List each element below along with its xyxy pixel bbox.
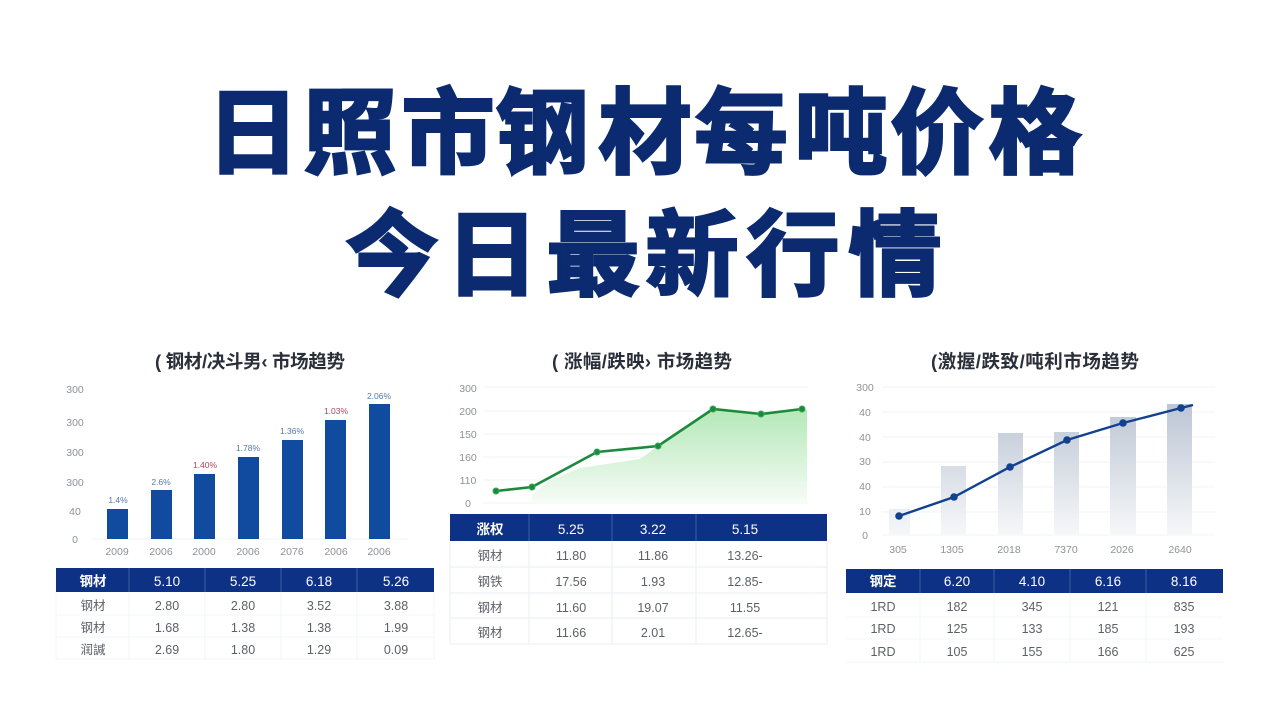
bar chart: yearly values: 1.4%	[108, 495, 128, 505]
title: 日照市钢材每吨价格	[206, 82, 1082, 186]
combo chart: bars with line: 40	[859, 481, 871, 493]
panel heading: middle: ( 涨幅/跌映› 市场趋势	[552, 351, 732, 372]
data table: right: 625	[1174, 645, 1194, 659]
data table: middle: 19.07	[637, 601, 669, 615]
combo chart: bars with line: 300	[856, 382, 874, 394]
data table: left: 1.68	[155, 621, 179, 635]
data table: left: 3.88	[384, 599, 408, 613]
combo chart: bars with line: 0	[862, 530, 868, 542]
data table: left: 2.69	[155, 643, 179, 657]
data table: middle: 钢材	[477, 626, 503, 640]
data table: left: 润諴	[80, 642, 106, 657]
bar chart: yearly values	[66, 384, 408, 558]
data table: middle: 1.93	[641, 575, 665, 589]
data table: left: 0.09	[384, 643, 408, 657]
combo chart: bars with line: 2018	[997, 544, 1021, 556]
data table: right	[846, 569, 1223, 662]
data table: right: 345	[1022, 600, 1042, 614]
data table: right: 1RD	[870, 622, 896, 636]
data table: right: 835	[1174, 600, 1194, 614]
data table: left: 2.80	[231, 599, 255, 613]
bar chart: yearly values: 2076	[280, 546, 304, 558]
line chart: green area: 300	[459, 383, 477, 395]
data table: left: 2.80	[155, 599, 179, 613]
data table: middle: 11.60	[556, 601, 586, 615]
data table: middle: 17.56	[555, 575, 587, 589]
data table: left: 3.52	[307, 599, 331, 613]
bar chart: yearly values: 0	[72, 534, 78, 546]
combo chart: bars with line: 7370	[1054, 544, 1078, 556]
line chart: green area: 150	[459, 429, 477, 441]
line chart: green area: 200	[459, 406, 477, 418]
data table: left: 1.29	[307, 643, 331, 657]
data table: right: 185	[1098, 622, 1118, 636]
data table: right: 4.10	[1019, 574, 1045, 589]
combo chart: bars with line: 30	[859, 456, 871, 468]
data table: right: 1RD	[870, 645, 896, 659]
data table: middle: 3.22	[640, 522, 666, 537]
bar chart: yearly values: 300	[66, 447, 84, 459]
bar chart: yearly values: 40	[69, 506, 81, 518]
line chart: green area: 0	[465, 498, 471, 510]
data table: middle: 钢铁	[477, 575, 503, 589]
data table: left	[56, 568, 434, 659]
data table: right: 6.16	[1095, 574, 1121, 589]
data table: middle: 11.66	[556, 626, 586, 640]
data table: left: 5.25	[230, 574, 256, 589]
data table: middle: 涨权	[476, 521, 504, 537]
data table: left: 1.99	[384, 621, 408, 635]
data table: right: 8.16	[1171, 574, 1197, 589]
bar chart: yearly values: 300	[66, 477, 84, 489]
bar chart: yearly values: 1.78%	[236, 443, 260, 453]
combo chart: bars with line: 2026	[1110, 544, 1134, 556]
bar chart: yearly values: 2000	[192, 546, 216, 558]
line chart: green area: 160	[459, 452, 477, 464]
combo chart: bars with line: 2640	[1168, 544, 1192, 556]
data table: middle: 5.25	[558, 522, 584, 537]
data table: left: 1.38	[307, 621, 331, 635]
data table: left: 钢材	[80, 599, 106, 613]
combo chart: bars with line: 40	[859, 432, 871, 444]
data table: middle: 5.15	[732, 522, 758, 537]
data table: middle: 11.55	[730, 601, 760, 615]
data table: left: 钢材	[80, 573, 107, 589]
bar chart: yearly values: 300	[66, 417, 84, 429]
data table: right: 105	[947, 645, 967, 659]
panel: left bar chart and table	[56, 351, 434, 659]
panel heading: right: (激握/跌致/吨利市场趋势	[931, 351, 1139, 372]
data table: right: 1RD	[870, 600, 896, 614]
data table: right: 125	[947, 622, 967, 636]
data table: middle: 11.80	[556, 549, 586, 563]
data table: middle: 11.86	[638, 549, 668, 563]
data table: middle: 2.01	[641, 626, 665, 640]
line chart: green area: 110	[460, 475, 477, 487]
bar chart: yearly values: 2006	[367, 546, 391, 558]
data table: right: 钢定	[870, 573, 897, 589]
bar chart: yearly values: 2006	[149, 546, 173, 558]
bar chart: yearly values: 2.06%	[367, 391, 391, 401]
combo chart: bars with line: 40	[859, 407, 871, 419]
bar chart: yearly values: 1.03%	[324, 406, 348, 416]
bar chart: yearly values: 2009	[105, 546, 129, 558]
data table: middle: 钢材	[477, 601, 503, 615]
data table: middle: 13.26-	[727, 549, 763, 563]
data table: left: 5.26	[383, 574, 409, 589]
data table: right: 182	[947, 600, 967, 614]
data table: right: 6.20	[944, 574, 970, 589]
data table: right: 133	[1022, 622, 1042, 636]
panel: middle line chart and table	[450, 351, 827, 644]
data table: middle: 12.65-	[727, 626, 763, 640]
line chart: green area	[459, 383, 808, 510]
title: 今日最新行情	[346, 204, 942, 308]
bar chart: yearly values: 2.6%	[151, 477, 171, 487]
data table: middle: 钢材	[477, 549, 503, 563]
panel heading: left: ( 钢材/决斗男‹ 市场趋势	[155, 351, 345, 372]
data table: right: 166	[1098, 645, 1118, 659]
data table: left: 1.80	[231, 643, 255, 657]
panel: right combo chart and table	[846, 351, 1223, 662]
data table: right: 155	[1022, 645, 1042, 659]
data table: middle: 12.85-	[727, 575, 763, 589]
bar chart: yearly values: 1.40%	[193, 460, 217, 470]
bar chart: yearly values: 2006	[324, 546, 348, 558]
combo chart: bars with line: 1305	[940, 544, 964, 556]
combo chart: bars with line: 305	[889, 544, 907, 556]
data table: left: 钢材	[80, 621, 106, 635]
bar chart: yearly values: 300	[66, 384, 84, 396]
data table: right: 193	[1174, 622, 1194, 636]
data table: middle	[450, 514, 827, 644]
data table: left: 6.18	[306, 574, 332, 589]
title	[206, 82, 1082, 308]
bar chart: yearly values: 1.36%	[280, 426, 304, 436]
bar chart: yearly values: 2006	[236, 546, 260, 558]
data table: left: 1.38	[231, 621, 255, 635]
combo chart: bars with line: 10	[859, 506, 871, 518]
data table: left: 5.10	[154, 574, 180, 589]
data table: right: 121	[1098, 600, 1118, 614]
combo chart: bars with line	[856, 382, 1215, 556]
